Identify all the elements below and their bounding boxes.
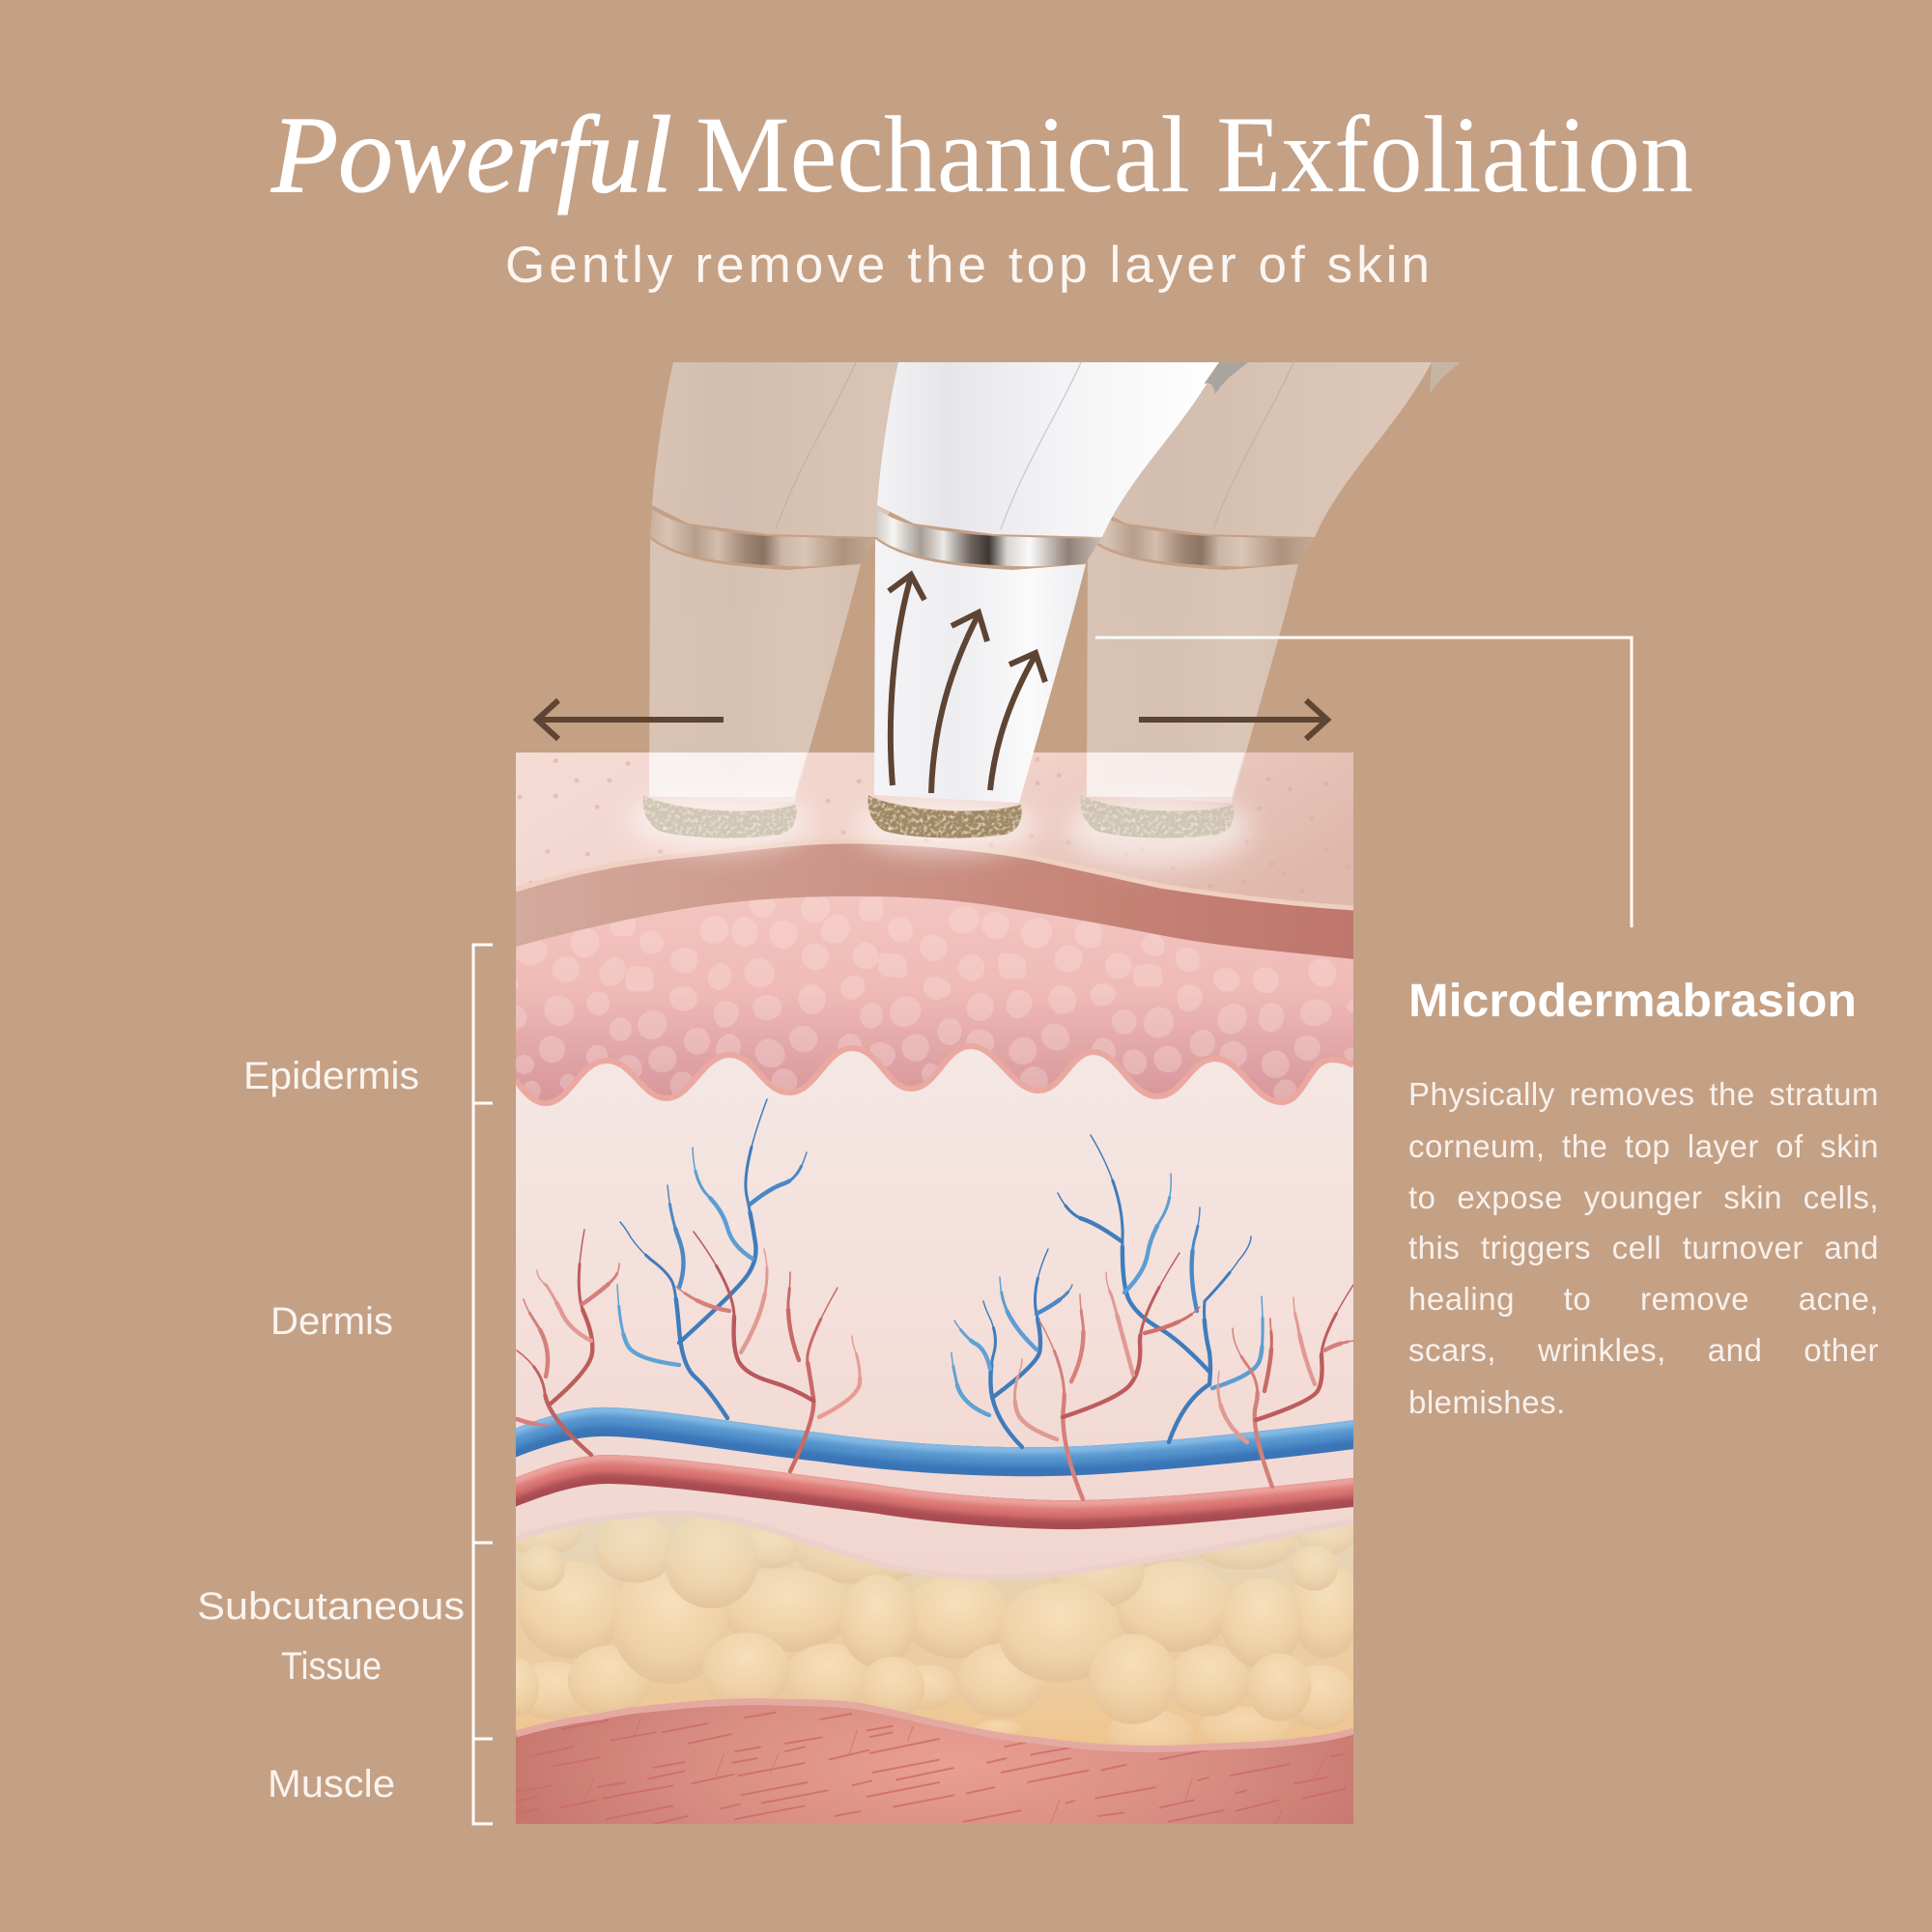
- main handle end: [1204, 362, 1248, 394]
- stratum highlight: [516, 841, 1353, 908]
- body text: blemishes.: [1408, 1384, 1566, 1420]
- arrow: up 2: [931, 612, 987, 793]
- arrow: up 3: [990, 653, 1045, 790]
- label: Epidermis: Epidermis: [243, 1055, 419, 1097]
- label: Subcutaneous Tissue: Subcutaneous: [197, 1585, 465, 1628]
- layer: epidermis: [503, 892, 1360, 1103]
- layer: subcutaneous fat: [516, 1517, 1353, 1746]
- epidermis edge: [516, 1046, 1353, 1103]
- arrow: up 1: [889, 575, 924, 785]
- panel: skin cross-section: [497, 753, 1362, 1833]
- label: Muscle: Muscle: [268, 1763, 395, 1805]
- body text: healing to remove acne,: [1408, 1281, 1879, 1317]
- body text: [1408, 1076, 1879, 1420]
- device: left ghost: [643, 362, 994, 838]
- layer: surface: [516, 753, 1353, 965]
- body text: to expose younger skin cells,: [1408, 1179, 1879, 1215]
- title: Powerful: Powerful: [270, 95, 672, 215]
- blood vessel: artery: [507, 1457, 1362, 1515]
- fat tone overlay: [516, 1517, 1353, 1746]
- body text: scars, wrinkles, and other: [1408, 1332, 1879, 1368]
- label: Subcutaneous Tissue: Tissue: [281, 1645, 382, 1688]
- layer: dermis: [516, 1034, 1353, 1584]
- arrow: left: [537, 700, 724, 739]
- subtitle: Gently remove the top layer of skin: [505, 237, 1430, 294]
- dermis-fat boundary: [516, 1514, 1353, 1577]
- epidermis cells: [503, 892, 1360, 1103]
- heading: Microdermabrasion: Microdermabrasion: [1408, 976, 1857, 1027]
- body text: corneum, the top layer of skin: [1408, 1128, 1879, 1164]
- layer: stratum band: [516, 843, 1353, 959]
- right ghost lower fade: [1087, 753, 1244, 797]
- main handle tip: [868, 795, 1022, 838]
- callout leader line: [1095, 638, 1632, 927]
- right ghost end: [1430, 362, 1461, 394]
- label: Dermis: Dermis: [270, 1300, 393, 1343]
- right ghost tip: [1081, 795, 1235, 838]
- arrow: right: [1139, 700, 1327, 739]
- label: Subcutaneous Tissue: [197, 1585, 465, 1688]
- body text: Physically removes the stratum: [1408, 1076, 1879, 1112]
- muscle fibers: [515, 1713, 1347, 1833]
- blood vessel: vein: [507, 1409, 1362, 1462]
- device: main handle: [868, 362, 1248, 838]
- layer: muscle: [515, 1702, 1353, 1833]
- left ghost tip: [643, 795, 797, 838]
- title: Mechanical Exfoliation: Mechanical Exfoliation: [696, 95, 1693, 215]
- capillaries: blue: [617, 1099, 1263, 1447]
- surface dots: [518, 757, 1351, 894]
- body text: this triggers cell turnover and: [1408, 1230, 1879, 1265]
- title: [270, 95, 1693, 215]
- glow under tips: [628, 790, 1251, 866]
- left ghost lower fade: [649, 753, 807, 797]
- muscle top edge: [516, 1702, 1353, 1748]
- device: right ghost: [1081, 362, 1461, 838]
- fat cells: [516, 1523, 1353, 1746]
- capillaries: red: [517, 1230, 1353, 1499]
- layer bracket: [473, 945, 493, 1824]
